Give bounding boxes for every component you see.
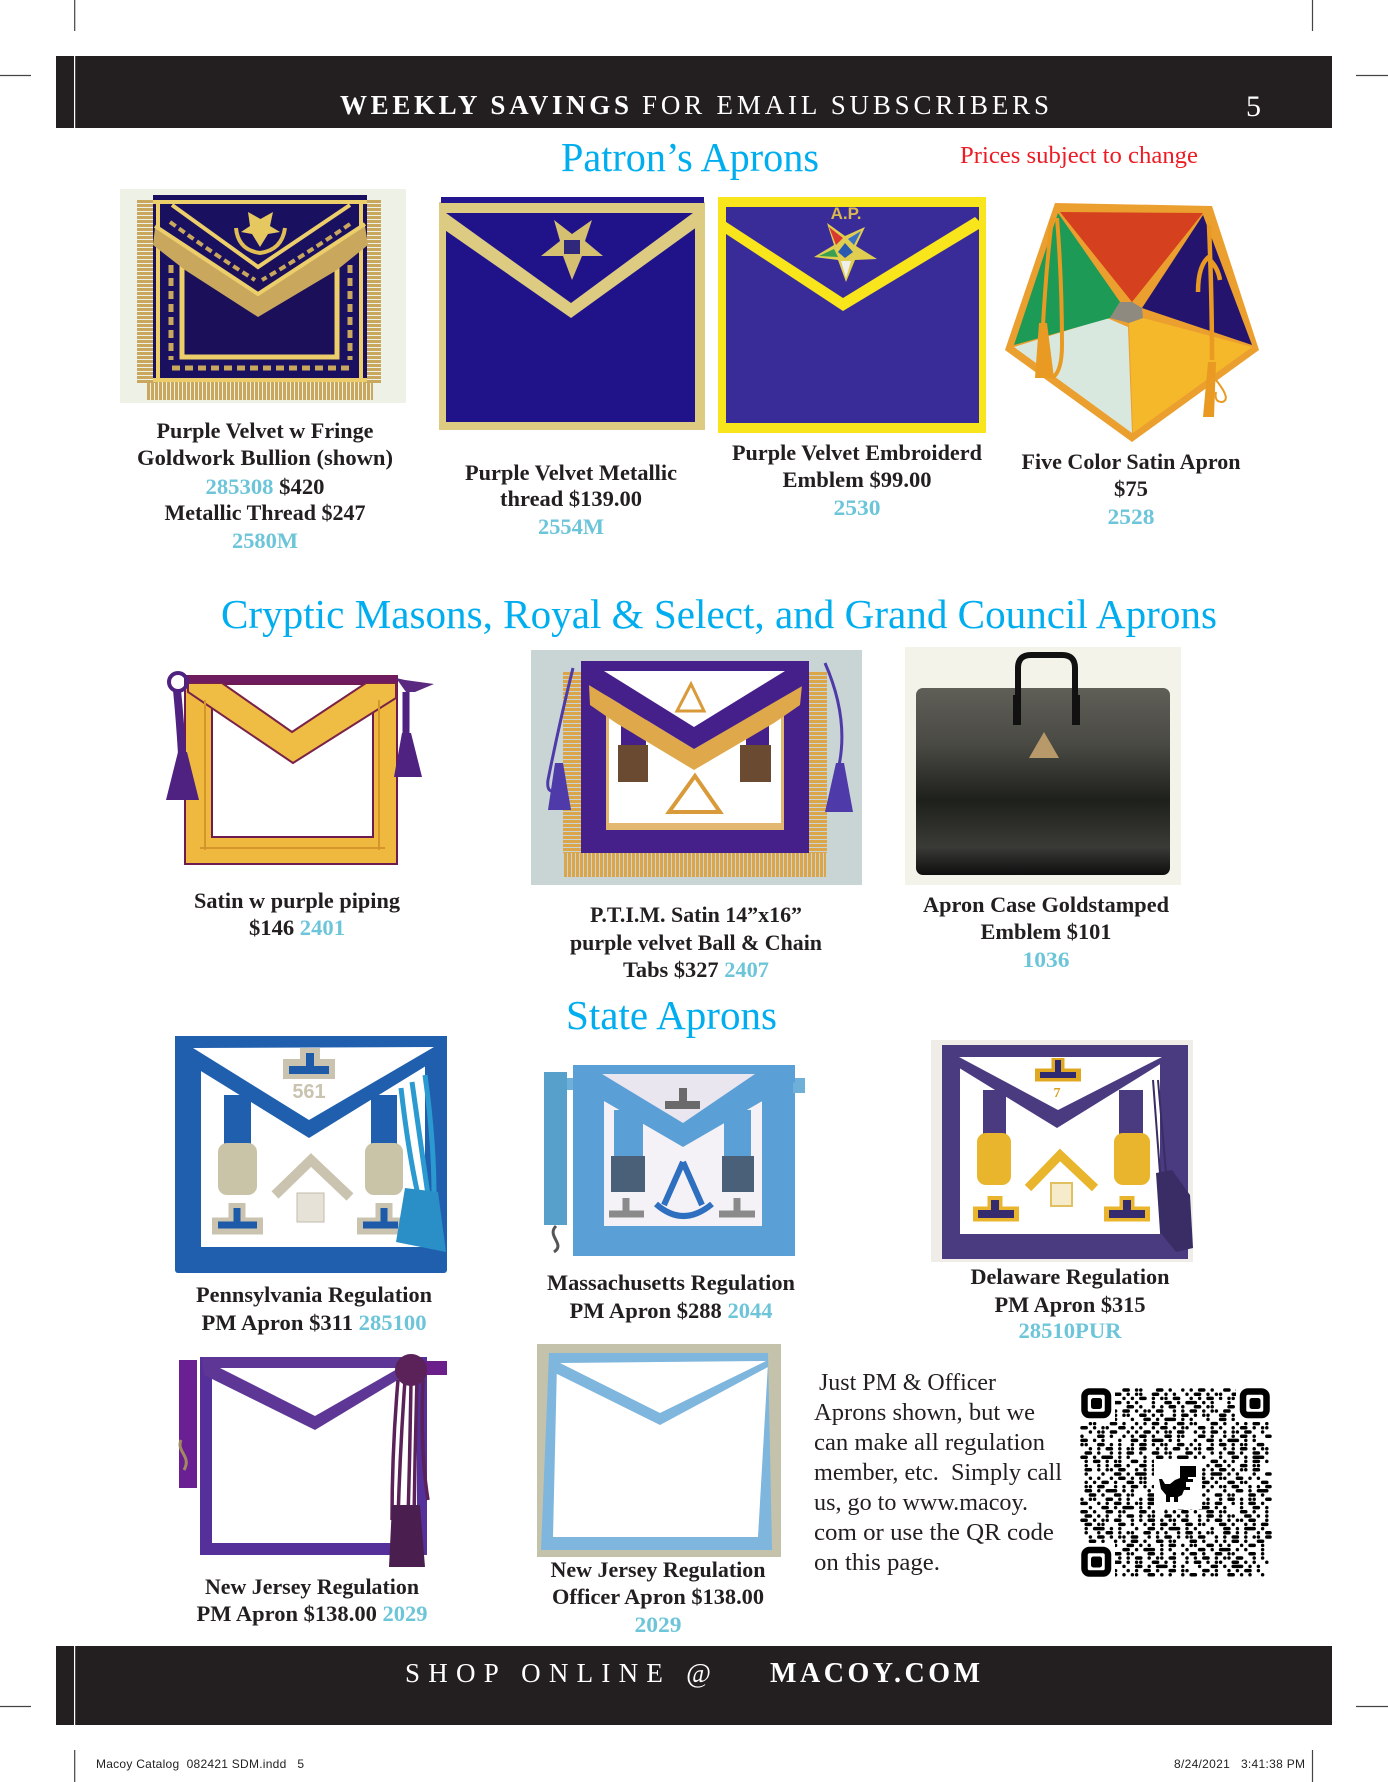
- caption: New Jersey PM: PM Apron $138.00 2029: [196, 1601, 428, 1626]
- apron: purple velvet embroidered emblem: A.P.: [831, 204, 861, 223]
- heading: Cryptic Masons: Cryptic Masons, Royal & Select, and Grand Council Aprons: [221, 591, 1217, 637]
- header bar: [56, 56, 1332, 128]
- caption: five color satin: [1022, 449, 1240, 529]
- text block: regulation note: Aprons shown, but we: [814, 1400, 1035, 1426]
- caption: satin with purple piping: [194, 888, 400, 940]
- caption: purple velvet with fringe: 2580M: [232, 528, 298, 553]
- apron: New Jersey officer: [537, 1344, 781, 1557]
- caption: purple velvet metallic: 2554M: [538, 514, 604, 539]
- caption: purple velvet embroidered emblem: Emblem $99.00: [782, 467, 932, 492]
- caption: satin with purple piping: $146 2401: [249, 915, 345, 940]
- caption: purple velvet embroidered emblem: Purple Velvet Embroiderd: [732, 440, 982, 465]
- heading: State Aprons: State Aprons: [566, 992, 777, 1038]
- caption: purple velvet with fringe: Metallic Thread $247: [164, 500, 366, 525]
- caption: apron case: [923, 892, 1169, 972]
- caption: Delaware: [970, 1264, 1170, 1343]
- text block: regulation note: member, etc. Simply call: [814, 1460, 1062, 1486]
- caption: Pennsylvania: [196, 1282, 432, 1335]
- text block: regulation note: com or use the QR code: [814, 1520, 1054, 1546]
- caption: Massachusetts: [547, 1270, 795, 1323]
- caption: five color satin: $75: [1114, 476, 1148, 501]
- apron: Massachusetts: [544, 1065, 805, 1256]
- caption: Massachusetts: Massachusetts Regulation: [547, 1270, 795, 1295]
- caption: New Jersey officer: 2029: [634, 1612, 682, 1637]
- caption: purple velvet with fringe: 285308 $420: [206, 474, 324, 499]
- caption: purple velvet metallic: Purple Velvet Metallic: [465, 460, 677, 485]
- caption: Pennsylvania: PM Apron $311 285100: [202, 1310, 426, 1335]
- apron: purple velvet metallic: [439, 197, 705, 430]
- print slug: file name: Macoy Catalog 082421 SDM.indd 5: [96, 1757, 304, 1771]
- caption: Delaware: 28510PUR: [1018, 1318, 1123, 1343]
- apron: Pennsylvania: 561: [292, 1081, 326, 1103]
- apron: Delaware: 7: [1054, 1086, 1060, 1101]
- apron: five color satin: [1005, 203, 1259, 442]
- print slug: date: 8/24/2021 3:41:38 PM: [1174, 1757, 1305, 1771]
- header bar: 5: [1246, 90, 1261, 123]
- header bar: WEEKLY SAVINGS: [340, 90, 629, 120]
- caption: apron case: 1036: [1022, 947, 1070, 972]
- note: prices subject to change: Prices subject to change: [960, 143, 1198, 169]
- text block: regulation note: us, go to www.macoy.: [814, 1490, 1028, 1516]
- text block: regulation note: Just PM & Officer: [819, 1370, 996, 1396]
- caption: New Jersey PM: New Jersey Regulation: [205, 1574, 419, 1599]
- caption: New Jersey PM: [196, 1574, 428, 1626]
- caption: New Jersey officer: New Jersey Regulation: [550, 1557, 766, 1582]
- QR code: [1078, 1385, 1273, 1580]
- apron: New Jersey PM: [179, 1354, 447, 1567]
- caption: purple velvet with fringe: [137, 418, 393, 553]
- text block: regulation note: [814, 1370, 1062, 1576]
- footer bar: MACOY.COM: [770, 1658, 980, 1689]
- caption: five color satin: Five Color Satin Apron: [1022, 449, 1240, 474]
- caption: purple velvet with fringe: Purple Velvet w Fringe: [156, 418, 374, 443]
- apron: purple velvet embroidered emblem: [718, 197, 986, 433]
- caption: P.T.I.M. satin: Tabs $327 2407: [623, 957, 769, 982]
- apron: satin with purple piping: [166, 673, 434, 864]
- caption: apron case: Apron Case Goldstamped: [923, 892, 1169, 917]
- caption: apron case: Emblem $101: [980, 919, 1112, 944]
- caption: satin with purple piping: Satin w purple piping: [194, 888, 400, 913]
- caption: New Jersey officer: Officer Apron $138.00: [552, 1584, 764, 1609]
- caption: Pennsylvania: Pennsylvania Regulation: [196, 1282, 432, 1307]
- icon: dinosaur: [1159, 1466, 1196, 1502]
- caption: P.T.I.M. satin: purple velvet Ball & Chain: [570, 930, 822, 955]
- caption: P.T.I.M. satin: P.T.I.M. Satin 14”x16”: [590, 902, 802, 927]
- caption: New Jersey officer: [550, 1557, 766, 1637]
- apron: Delaware: [931, 1040, 1193, 1262]
- caption: purple velvet embroidered emblem: 2530: [834, 495, 880, 520]
- apron case: [905, 647, 1181, 885]
- apron: P.T.I.M. satin: [531, 650, 862, 885]
- apron: Pennsylvania: [175, 1036, 447, 1273]
- caption: five color satin: 2528: [1108, 504, 1154, 529]
- footer bar: SHOP ONLINE @: [405, 1658, 711, 1688]
- caption: Massachusetts: PM Apron $288 2044: [570, 1298, 772, 1323]
- caption: P.T.I.M. satin: [570, 902, 822, 982]
- caption: purple velvet metallic: [465, 460, 677, 539]
- text block: regulation note: can make all regulation: [814, 1430, 1045, 1456]
- caption: purple velvet embroidered emblem: [732, 440, 982, 520]
- footer bar: [56, 1646, 1332, 1725]
- header bar: FOR EMAIL SUBSCRIBERS: [642, 90, 1049, 120]
- caption: Delaware: PM Apron $315: [994, 1292, 1146, 1317]
- caption: purple velvet metallic: thread $139.00: [500, 486, 642, 511]
- caption: Delaware: Delaware Regulation: [970, 1264, 1170, 1289]
- heading: Patron's Aprons: Patron’s Aprons: [561, 134, 819, 180]
- caption: purple velvet with fringe: Goldwork Bullion (shown): [137, 445, 393, 470]
- text block: regulation note: on this page.: [814, 1550, 940, 1576]
- apron: purple velvet with fringe: [120, 189, 406, 403]
